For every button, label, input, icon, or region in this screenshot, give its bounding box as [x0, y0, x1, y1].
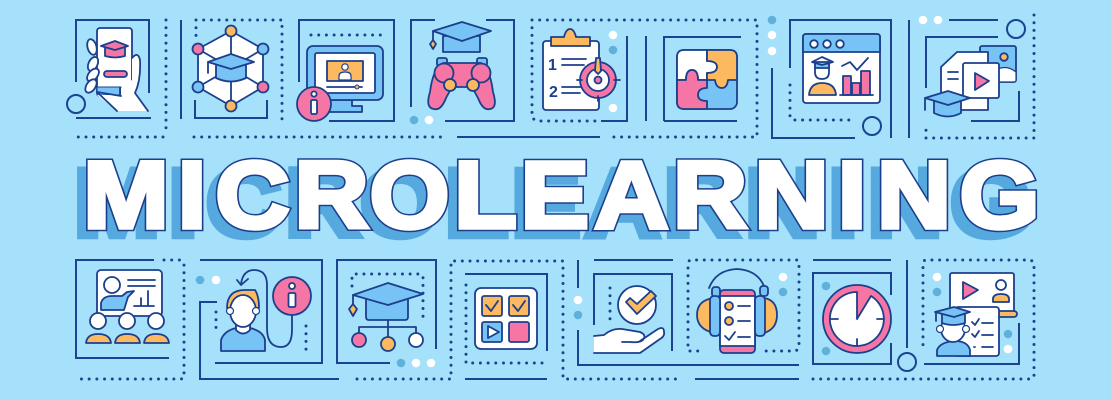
panel: audio learning phone — [688, 260, 799, 379]
panel: online analytics window — [768, 16, 891, 138]
panel: gamified learning — [410, 20, 514, 124]
panel: video lesson monitor — [297, 20, 394, 121]
icon: student with board — [935, 273, 1017, 356]
panel: instructor presentation — [75, 260, 184, 379]
icon: person and info bubble — [221, 270, 311, 351]
panel: puzzle — [646, 36, 741, 121]
icon: graduation cap network — [192, 26, 268, 112]
icon: clipboard with target — [543, 29, 620, 110]
icon: documents, video and cap — [925, 46, 1016, 116]
icon: puzzle pieces — [677, 50, 737, 109]
icon: clock timer — [823, 285, 891, 353]
icon: hand and check — [594, 286, 664, 353]
icon: quiz card — [475, 288, 537, 349]
icon: monitor with info badge — [297, 46, 383, 121]
title: MICROLEARNING: MICROLEARNING — [83, 141, 1039, 248]
panel: hand with check mark — [574, 260, 799, 365]
title: MICROLEARNING: MICROLEARNING — [83, 141, 1039, 248]
icon: cap and game controller — [428, 22, 495, 109]
panel: cap knowledge tree — [337, 260, 680, 379]
panel: goal checklist — [194, 20, 757, 137]
icon: cap with hierarchy — [349, 283, 423, 351]
panel: quiz choices — [465, 274, 547, 379]
panel: student with video and checklist — [813, 260, 1034, 379]
text: list numbers — [548, 57, 558, 101]
panel: learner information — [196, 260, 339, 379]
panel: clock — [813, 260, 891, 364]
icon: phone with headphones — [697, 269, 777, 353]
text: list numbers: 1 — [548, 57, 557, 74]
icon: hand holding phone — [83, 28, 148, 111]
panel: mobile learning — [67, 20, 166, 137]
panel: learning network — [181, 20, 282, 119]
panel: multimedia content — [909, 15, 1034, 138]
icon: browser with student and chart — [803, 34, 880, 103]
text: list numbers: 2 — [549, 84, 558, 101]
icon: class with whiteboard — [86, 270, 169, 343]
title: MICROLEARNING: MICROLEARNING — [74, 149, 1030, 256]
